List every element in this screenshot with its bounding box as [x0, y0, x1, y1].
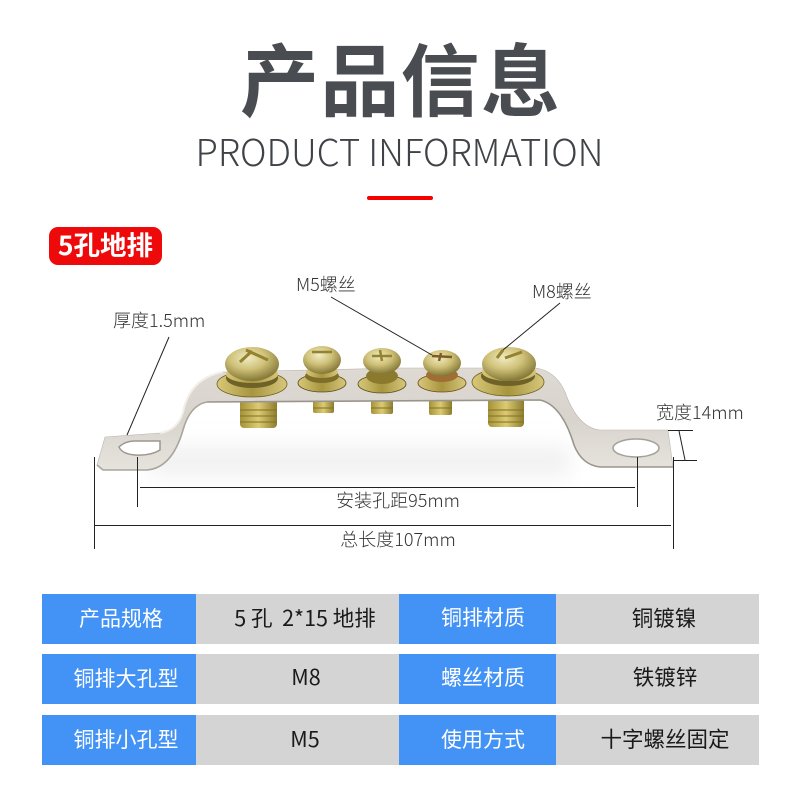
screw 2 [298, 346, 346, 392]
row 3: 使用方式 [441, 724, 525, 754]
metal busbar [97, 368, 673, 470]
threads [240, 396, 524, 428]
dimension: total length: 总长度107mm [340, 526, 456, 552]
row 2: 铜排大孔型 [74, 663, 178, 693]
mounting holes [119, 441, 160, 455]
row 3: 铜排小孔型 [74, 724, 178, 754]
annotation: width [656, 399, 744, 460]
ground shadow [150, 446, 570, 476]
row 1 [42, 594, 759, 644]
screw 3 [358, 348, 406, 393]
row 3: 十字螺丝固定 [600, 723, 730, 754]
row 1: 铜排材质 [441, 602, 525, 632]
title: 产品信息 [240, 18, 560, 133]
row 1: 铜镀镍 [632, 602, 696, 633]
row 3 [42, 715, 759, 765]
annotation: M8 screw [503, 278, 592, 350]
row 1: 5 孔 2*15 地排 [234, 602, 376, 633]
annotation: M5 screw: M5螺丝 [296, 271, 356, 297]
row 2: M8 [291, 661, 321, 692]
badge: 5孔地排: 5孔地排 [58, 224, 153, 263]
dimension: hole spacing: 安装孔距95mm [336, 487, 460, 513]
annotation: thickness: 厚度1.5mm [113, 307, 205, 333]
dimension: total length [94, 457, 674, 552]
annotation: width: 宽度14mm [656, 399, 744, 425]
annotation: M5 screw [296, 271, 432, 355]
dimension: hole spacing [138, 457, 638, 513]
screw 1 M8 [217, 347, 287, 397]
row 3: M5 [290, 723, 320, 754]
row 2 [42, 654, 759, 704]
red accent line [367, 196, 433, 200]
annotation: M8 screw: M8螺丝 [532, 278, 592, 304]
product photo: busbar with screws [97, 346, 673, 476]
spec table [42, 594, 759, 765]
subtitle: PRODUCT INFORMATION [196, 123, 604, 177]
annotation: thickness [113, 307, 205, 435]
row 2: 铁镀锌 [633, 661, 697, 692]
screw 5 M8 [472, 347, 544, 396]
screw 4 [418, 350, 466, 392]
row 2: 螺丝材质 [441, 662, 525, 692]
row 1: 产品规格 [79, 603, 163, 633]
